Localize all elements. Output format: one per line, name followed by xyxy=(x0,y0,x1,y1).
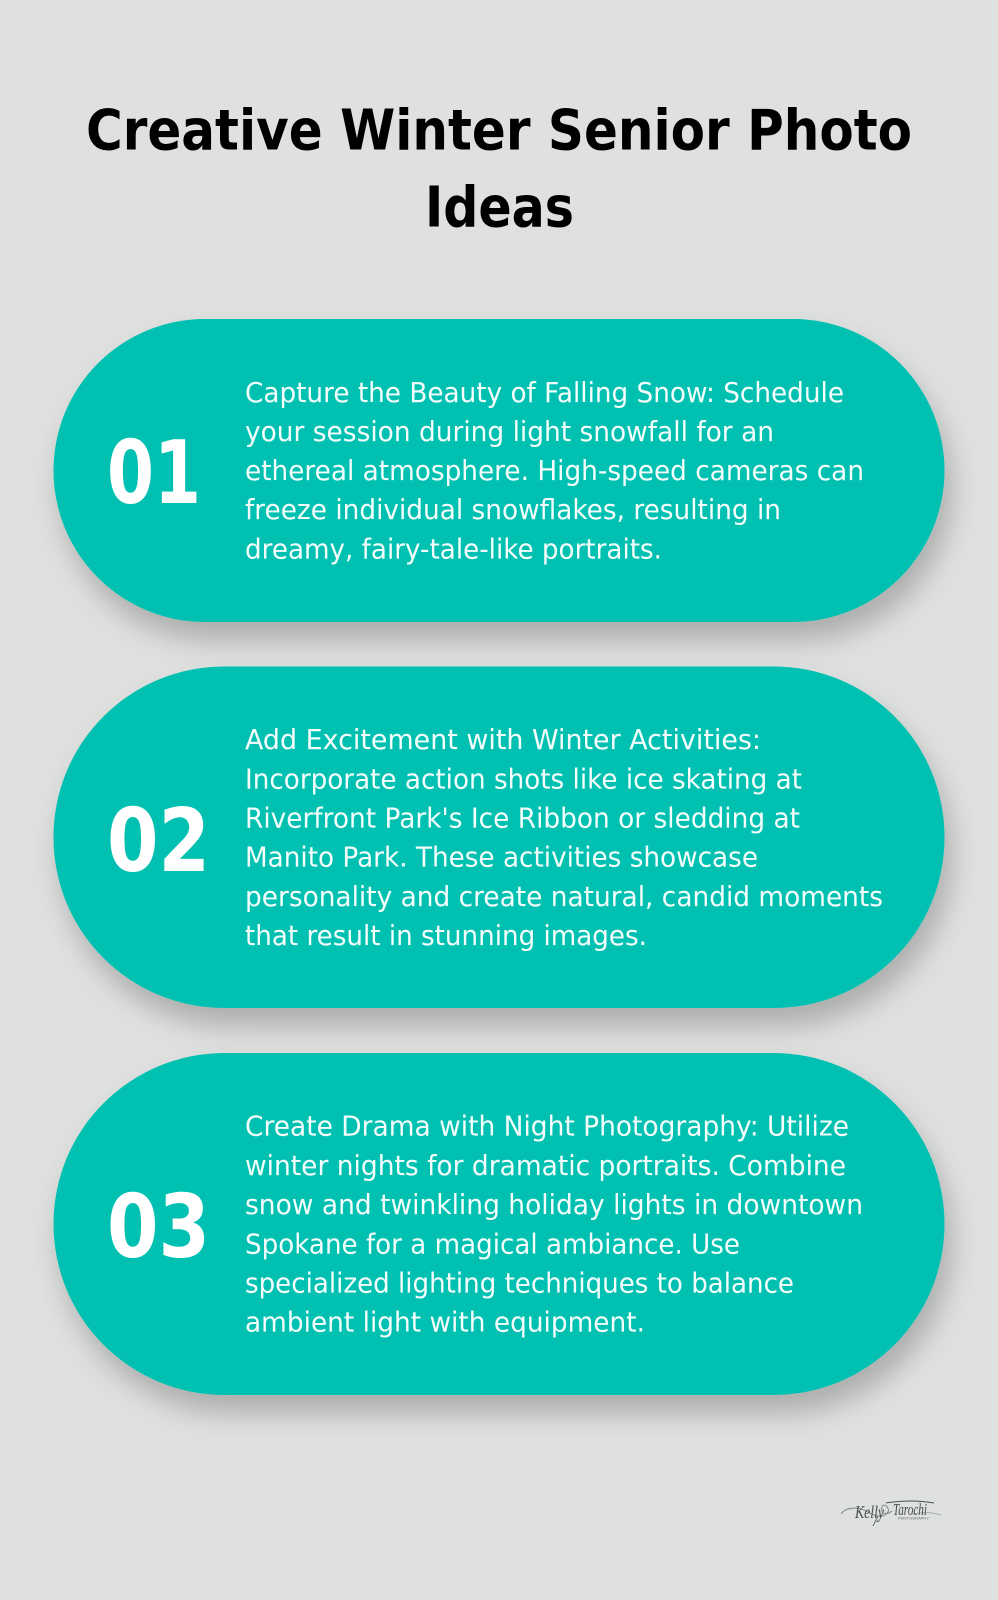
text block 02: Add Excitement with Winter Activities: xyxy=(245,724,761,756)
text block 02: Incorporate action shots like ice skating at xyxy=(245,763,802,795)
title: Creative Winter Senior Photo xyxy=(86,98,912,164)
title: Ideas xyxy=(425,176,574,240)
panel: idea 03 night photography xyxy=(54,1053,944,1395)
number 02: 02 xyxy=(107,790,210,892)
number 03: 03 xyxy=(107,1176,210,1278)
text block 03: ambient light with equipment. xyxy=(245,1306,645,1338)
pill background 01 xyxy=(54,319,944,622)
logo: Kelly Tarochi Photography signature: Tarochi xyxy=(893,1500,927,1519)
text block 03: snow and twinkling holiday lights in downtown xyxy=(245,1189,863,1221)
pill background 03 xyxy=(54,1053,944,1395)
logo: Kelly Tarochi Photography signature: PHOTOGRAPHY xyxy=(898,1516,930,1520)
number 01: 01 xyxy=(107,422,201,524)
text block 01 xyxy=(245,377,864,566)
text block 02: Manito Park. These activities showcase xyxy=(245,842,758,874)
panel: idea 02 winter activities xyxy=(54,666,944,1008)
text block 03: specialized lighting techniques to balance xyxy=(245,1268,794,1300)
text block 03: winter nights for dramatic portraits. Combine xyxy=(245,1150,846,1182)
text block 01: your session during light snowfall for an xyxy=(245,416,774,448)
text block 02 xyxy=(245,724,883,952)
text block 02: personality and create natural, candid moments xyxy=(245,881,883,913)
text block 02: that result in stunning images. xyxy=(245,920,647,952)
text block 01: Capture the Beauty of Falling Snow: Schedule xyxy=(245,377,844,409)
logo: Kelly Tarochi Photography signature xyxy=(841,1500,941,1526)
text block 03: Create Drama with Night Photography: Utilize xyxy=(245,1111,849,1143)
text block 01: ethereal atmosphere. High-speed cameras can xyxy=(245,455,864,487)
logo: Kelly Tarochi Photography signature: Kelly xyxy=(854,1502,884,1522)
panel: idea 01 falling snow xyxy=(54,319,944,622)
text block 03: Spokane for a magical ambiance. Use xyxy=(245,1228,740,1260)
pill background 02 xyxy=(54,666,944,1008)
title xyxy=(86,98,912,240)
text block 01: dreamy, fairy-tale-like portraits. xyxy=(245,534,662,566)
text block 01: freeze individual snowflakes, resulting in xyxy=(245,494,781,526)
text block 02: Riverfront Park's Ice Ribbon or sledding at xyxy=(245,802,800,834)
text block 03 xyxy=(245,1111,863,1338)
